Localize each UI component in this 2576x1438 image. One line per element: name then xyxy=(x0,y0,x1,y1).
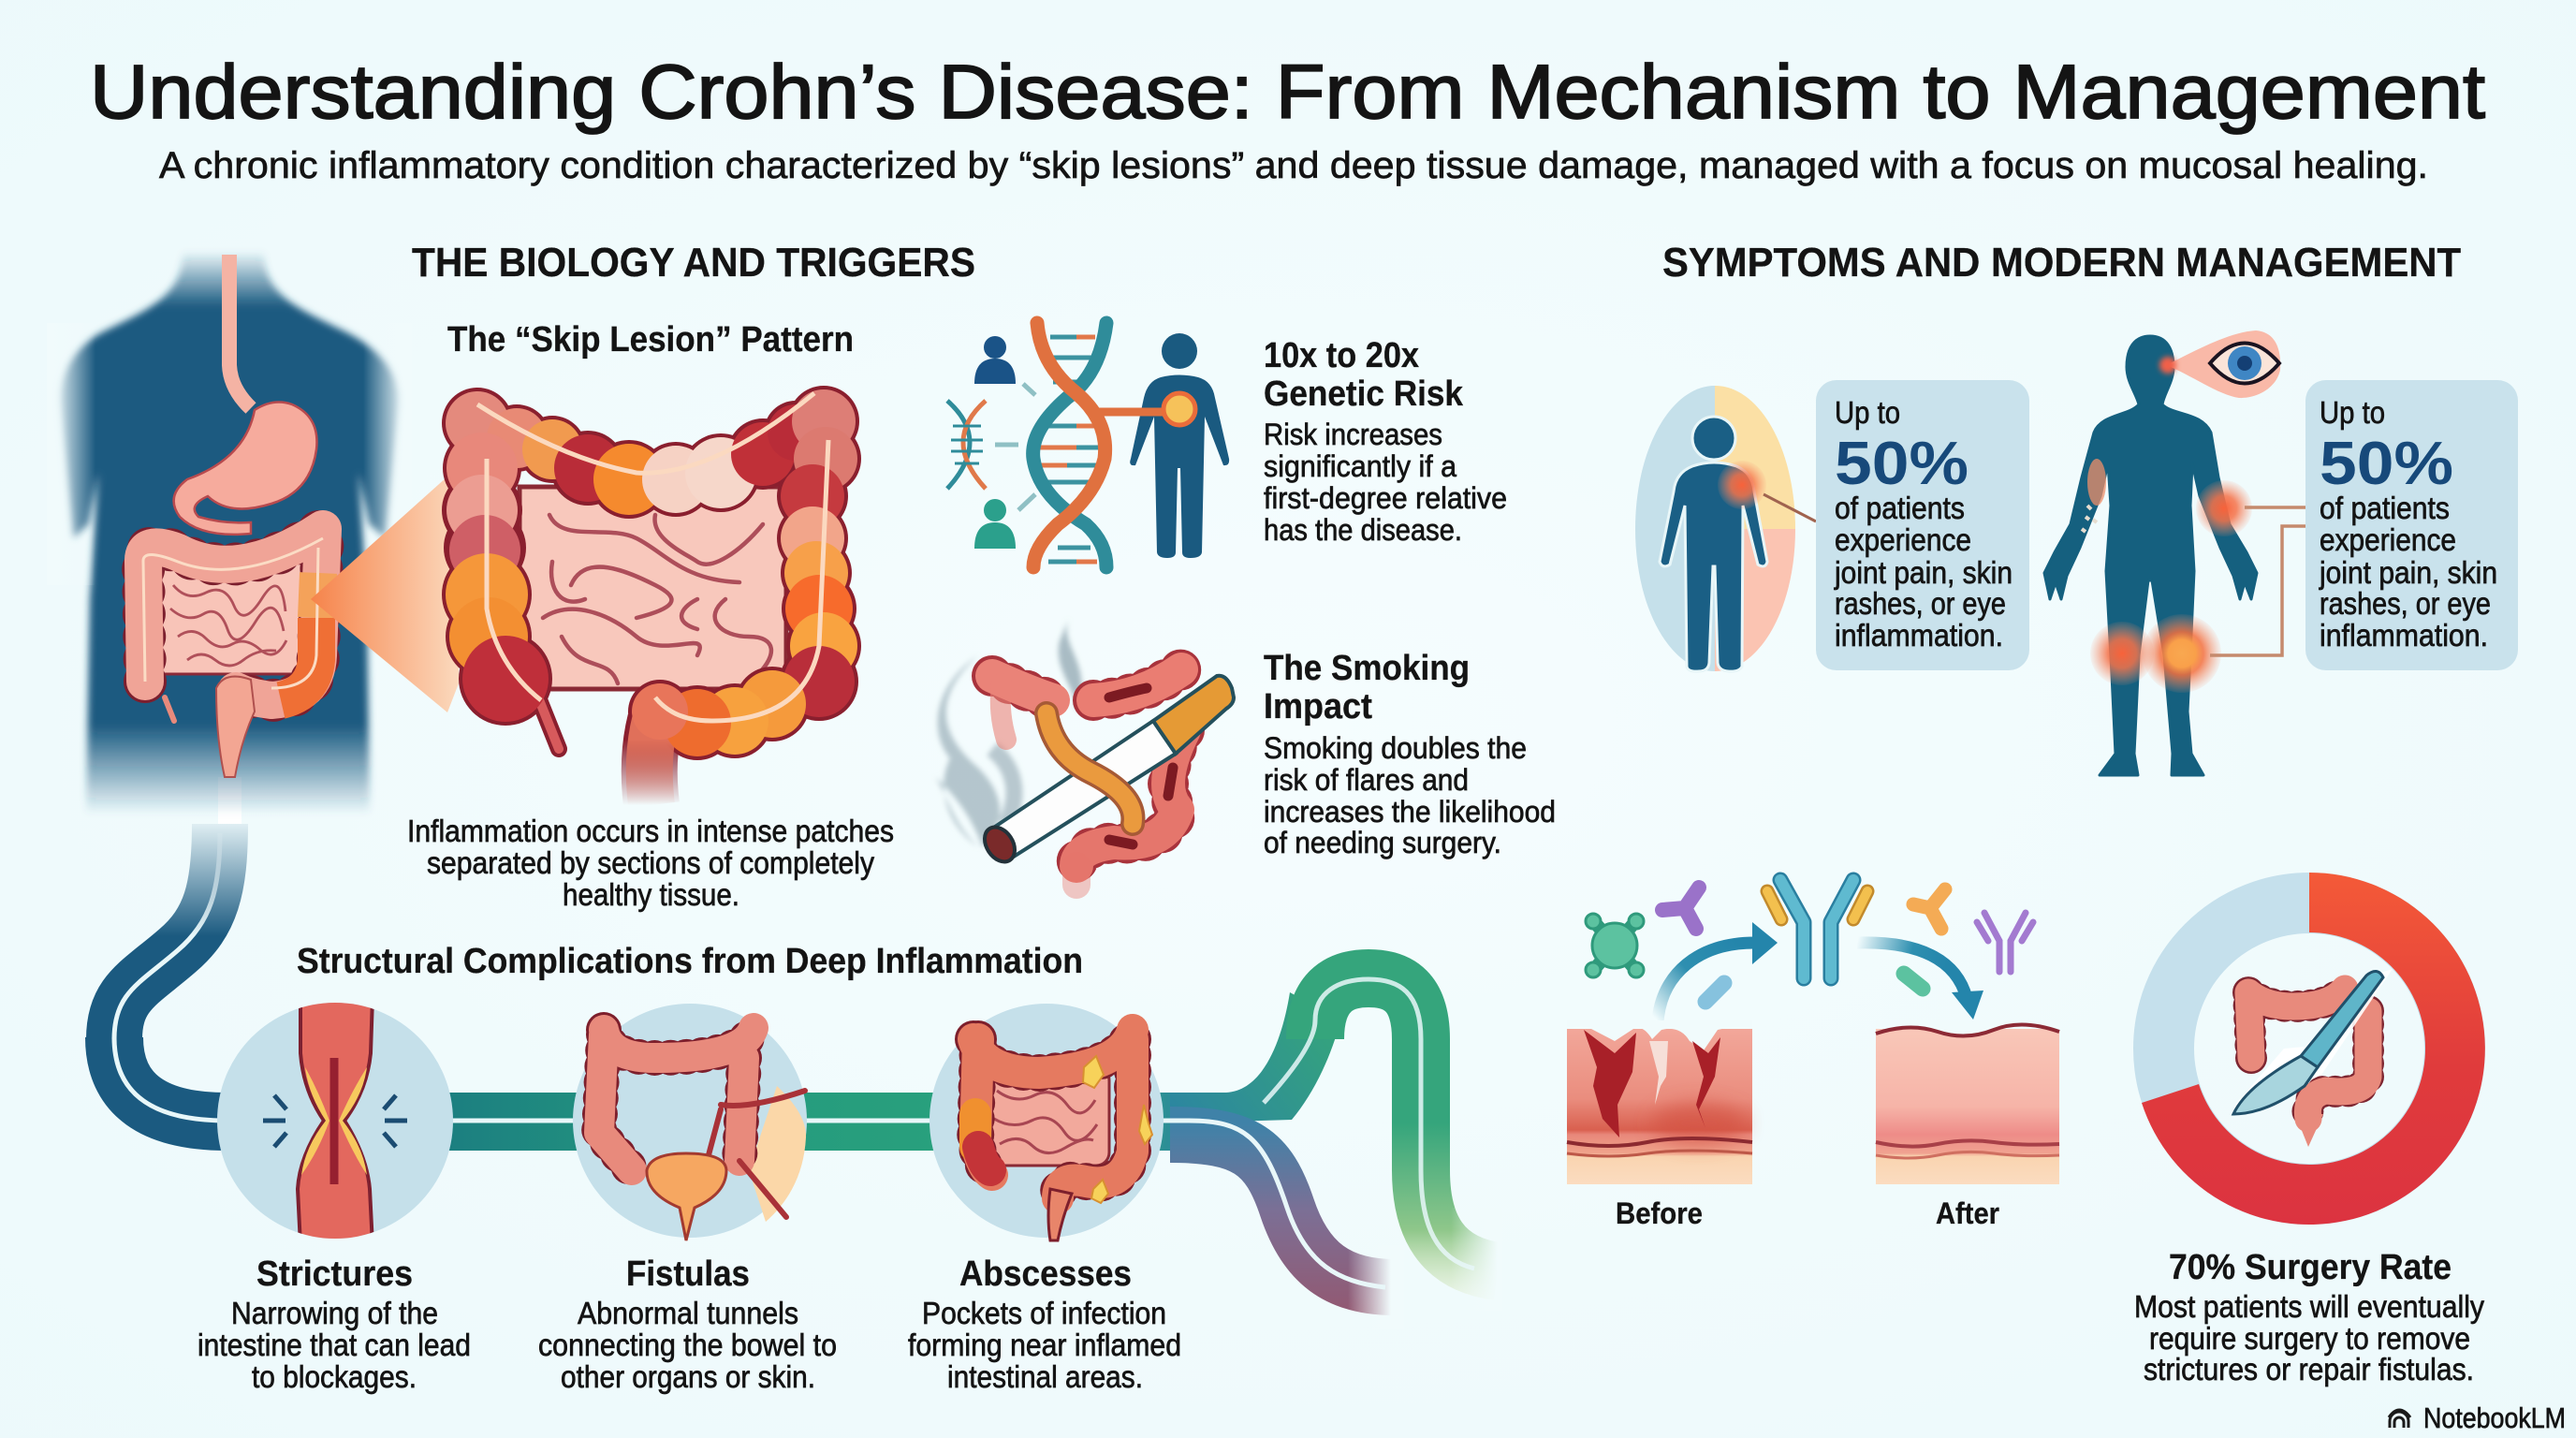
panel: stat card left: inflammation. xyxy=(1835,618,2003,653)
text: abscesses: Pockets of infection xyxy=(922,1296,1166,1330)
stomach xyxy=(174,403,316,535)
text: strictures: intestine that can lead xyxy=(198,1328,471,1362)
orange molecule xyxy=(1913,889,1945,929)
panel: stat card right xyxy=(2305,380,2518,670)
joint glows xyxy=(2090,480,2252,693)
text: abscesses xyxy=(908,1255,1181,1394)
title: Understanding Crohn’s Disease: From Mechanism to Management xyxy=(90,50,2485,135)
smoke xyxy=(936,618,1082,847)
skip lesion description: separated by sections of completely xyxy=(427,845,874,880)
text: genetic risk: first-degree relative xyxy=(1264,481,1507,515)
callout wedge xyxy=(311,477,459,712)
panel: stat card left: of patients xyxy=(1835,491,1965,525)
text: strictures: Narrowing of the xyxy=(231,1296,438,1330)
arrow from antibody xyxy=(1857,943,1983,1020)
heading: symptoms and management: SYMPTOMS AND MODERN MANAGEMENT xyxy=(1662,240,2461,286)
text: surgery rate xyxy=(2134,1248,2484,1387)
icon: small person with joint pain xyxy=(1635,386,1816,671)
skin rash xyxy=(2082,459,2106,532)
text: strictures: Strictures xyxy=(256,1255,413,1294)
text: fistulas xyxy=(538,1255,837,1394)
text: genetic risk: Risk increases xyxy=(1264,418,1442,451)
text: smoking impact: The Smoking xyxy=(1264,649,1470,688)
text: fistulas: other organs or skin. xyxy=(561,1359,815,1394)
heading: structural complications: Structural Complications from Deep Inflammation xyxy=(297,942,1083,981)
torso silhouette xyxy=(60,253,400,814)
chart: surgery donut xyxy=(2142,873,2485,1225)
leader lines xyxy=(2210,507,2305,655)
text: fistulas: Fistulas xyxy=(626,1255,750,1294)
text: genetic risk: significantly if a xyxy=(1264,449,1456,483)
icon: full body figure with symptoms xyxy=(2044,330,2305,775)
eye callout xyxy=(2159,330,2280,398)
panel: stat card right: 50% xyxy=(2320,429,2453,497)
text: strictures xyxy=(198,1255,471,1394)
large colon with skip lesions xyxy=(442,386,861,805)
figure xyxy=(2044,336,2257,775)
text: fistulas: connecting the bowel to xyxy=(538,1328,837,1362)
blue dumbbell xyxy=(1705,983,1724,1002)
small intestine xyxy=(520,487,786,689)
text: fistulas: Abnormal tunnels xyxy=(578,1296,798,1330)
text: surgery rate: 70% Surgery Rate xyxy=(2169,1248,2452,1287)
panel: stat card left xyxy=(1816,380,2029,670)
intestine xyxy=(992,669,1184,885)
text: genetic risk: has the disease. xyxy=(1264,513,1462,547)
skip lesion description xyxy=(407,814,894,912)
stricture illustration xyxy=(217,997,453,1245)
text: abscesses: Abscesses xyxy=(959,1255,1132,1294)
flow pipeline xyxy=(114,777,1502,1329)
panel: stat card right: rashes, or eye xyxy=(2320,586,2491,621)
person xyxy=(1090,333,1229,558)
mucosal highlight xyxy=(477,393,828,721)
cigarette xyxy=(978,676,1234,867)
icons: molecules and antibodies xyxy=(1586,880,2033,1021)
appendix xyxy=(538,697,559,749)
small purple antibody xyxy=(1977,913,2033,972)
text: genetic risk: 10x to 20x xyxy=(1264,336,1419,375)
small colon xyxy=(143,529,323,777)
text: surgery rate: strictures or repair fistulas. xyxy=(2144,1352,2474,1387)
panel: stat card left: experience xyxy=(1835,522,1971,557)
icon: genetics xyxy=(947,323,1229,567)
label: before: Before xyxy=(1616,1196,1703,1230)
rectum stub xyxy=(650,721,655,805)
text: genetic risk xyxy=(1264,336,1507,547)
fistula illustration xyxy=(573,1004,807,1240)
text: strictures: to blockages. xyxy=(252,1359,417,1394)
green dumbbell xyxy=(1904,974,1923,989)
skip lesion description: Inflammation occurs in intense patches xyxy=(407,814,894,848)
text: surgery rate: Most patients will eventually xyxy=(2134,1289,2484,1324)
skip lesion description: healthy tissue. xyxy=(563,877,739,912)
panel: stat card right: Up to xyxy=(2320,395,2385,430)
text: smoking impact: risk of flares and xyxy=(1264,763,1469,797)
stained loop xyxy=(1046,713,1133,824)
text: smoking impact: increases the likelihood xyxy=(1264,795,1556,829)
arrow to antibody xyxy=(1658,922,1778,1021)
icon: smoking xyxy=(936,618,1234,885)
panel: stat card right: experience xyxy=(2320,522,2456,557)
abscess illustration xyxy=(929,1004,1164,1240)
panel: stat card right: joint pain, skin xyxy=(2319,555,2497,590)
text: smoking impact: Smoking doubles the xyxy=(1264,731,1527,765)
text: surgery rate: require surgery to remove xyxy=(2149,1321,2470,1356)
text: smoking impact: of needing surgery. xyxy=(1264,826,1501,859)
text: smoking impact xyxy=(1264,649,1556,859)
icon: colon and scalpel xyxy=(2233,969,2393,1147)
body with digestive system xyxy=(47,253,412,814)
green cytokine xyxy=(1586,914,1644,977)
panel: stat card left: Up to xyxy=(1835,395,1900,430)
text: smoking impact: Impact xyxy=(1264,687,1372,726)
text: genetic risk: Genetic Risk xyxy=(1264,374,1464,414)
esophagus xyxy=(229,255,251,408)
label: after: After xyxy=(1936,1196,1999,1230)
panel: stat card right: inflammation. xyxy=(2320,618,2488,653)
panel: stat card left: joint pain, skin xyxy=(1834,555,2012,590)
heading: skip lesion: The “Skip Lesion” Pattern xyxy=(447,320,854,360)
purple molecule xyxy=(1662,888,1699,929)
text: abscesses: intestinal areas. xyxy=(947,1359,1143,1394)
family icons xyxy=(947,336,1035,549)
helix xyxy=(1033,323,1106,567)
subtitle: A chronic inflammatory condition characterized by “skip lesions” and deep tissue damage, managed with a focus on mucosal healing. xyxy=(159,145,2428,186)
panel: stat card right: of patients xyxy=(2320,491,2450,525)
text: abscesses: forming near inflamed xyxy=(908,1328,1181,1362)
panel: stat card left: 50% xyxy=(1835,429,1969,497)
main antibody xyxy=(1767,880,1867,978)
tissue: before xyxy=(1567,1020,1752,1184)
tissue: after xyxy=(1876,1020,2059,1184)
panel: stat card left: rashes, or eye xyxy=(1835,586,2006,621)
heading: biology and triggers: THE BIOLOGY AND TRIGGERS xyxy=(412,240,975,286)
